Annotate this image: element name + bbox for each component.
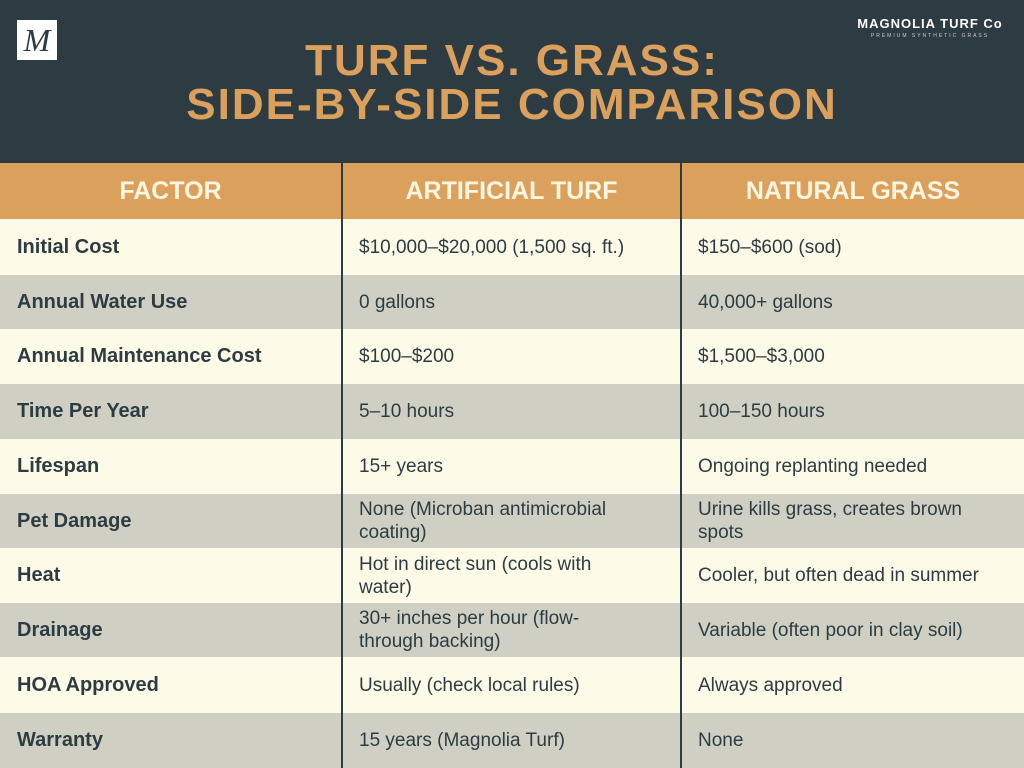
header band bbox=[0, 0, 1024, 163]
row: heat: Cooler, but often dead in summer bbox=[698, 565, 979, 586]
row: lifespan bbox=[0, 439, 1024, 494]
logo mark bbox=[17, 20, 57, 60]
row: HOA bbox=[0, 657, 1024, 713]
table header: natural grass: NATURAL GRASS bbox=[746, 177, 960, 205]
brand name bbox=[857, 16, 1003, 39]
row: time bbox=[0, 384, 1024, 439]
row: time: Time Per Year bbox=[17, 400, 149, 422]
row: warranty bbox=[0, 713, 1024, 768]
row: pet damage bbox=[0, 494, 1024, 548]
row: initial cost bbox=[0, 219, 1024, 275]
title: TURF VS. GRASS: bbox=[305, 36, 719, 85]
title bbox=[186, 36, 838, 129]
row: drainage: Drainage bbox=[17, 618, 103, 640]
row: heat: Hot in direct sun (cools with bbox=[359, 554, 591, 574]
table header: natural grass bbox=[682, 163, 1024, 219]
table header: factor bbox=[0, 163, 341, 219]
row: water: Annual Water Use bbox=[17, 290, 187, 312]
row: water: 0 gallons bbox=[359, 292, 435, 312]
row: drainage: 30+ inches per hour (flow- bbox=[359, 608, 579, 629]
table header: factor: FACTOR bbox=[119, 177, 222, 205]
row: initial cost: Initial Cost bbox=[17, 236, 119, 258]
row: pet damage: Pet Damage bbox=[17, 510, 132, 532]
row: drainage: through backing) bbox=[359, 631, 501, 652]
row: time: 100–150 hours bbox=[698, 401, 825, 422]
row: pet damage: Urine kills grass, creates brown bbox=[698, 499, 962, 520]
row: maintenance bbox=[0, 329, 1024, 384]
row: warranty: Warranty bbox=[17, 729, 103, 751]
row: drainage bbox=[0, 603, 1024, 657]
row: initial cost: $150–$600 (sod) bbox=[698, 236, 842, 258]
row: time: 5–10 hours bbox=[359, 401, 454, 422]
row: pet damage: coating) bbox=[359, 522, 427, 543]
row: heat: Heat bbox=[17, 564, 60, 586]
row: maintenance: $100–$200 bbox=[359, 346, 454, 367]
row: pet damage: spots bbox=[698, 522, 743, 543]
row: HOA: HOA Approved bbox=[17, 674, 159, 696]
row: initial cost: $10,000–$20,000 (1,500 sq. ft.) bbox=[359, 236, 624, 258]
row: lifespan: Ongoing replanting needed bbox=[698, 456, 927, 477]
row: water: 40,000+ gallons bbox=[698, 292, 833, 312]
logo mark: M bbox=[24, 22, 50, 58]
row: maintenance: $1,500–$3,000 bbox=[698, 346, 825, 367]
table header: artificial turf: ARTIFICIAL TURF bbox=[405, 177, 618, 205]
row: pet damage: None (Microban antimicrobial bbox=[359, 499, 606, 520]
title: SIDE-BY-SIDE COMPARISON bbox=[186, 80, 838, 129]
row: water bbox=[0, 275, 1024, 329]
row: HOA: Always approved bbox=[698, 674, 843, 696]
brand name: PREMIUM SYNTHETIC GRASS bbox=[871, 33, 989, 39]
row: HOA: Usually (check local rules) bbox=[359, 674, 580, 696]
row: warranty: 15 years (Magnolia Turf) bbox=[359, 730, 565, 751]
row: heat: water) bbox=[359, 576, 412, 598]
row: heat bbox=[0, 548, 1024, 603]
row: warranty: None bbox=[698, 730, 743, 751]
table header: artificial turf bbox=[343, 163, 680, 219]
row: lifespan: Lifespan bbox=[17, 455, 99, 477]
brand name: MAGNOLIA TURF Co bbox=[857, 16, 1003, 31]
row: maintenance: Annual Maintenance Cost bbox=[17, 345, 261, 367]
row: drainage: Variable (often poor in clay soil) bbox=[698, 620, 963, 640]
row: lifespan: 15+ years bbox=[359, 456, 443, 477]
